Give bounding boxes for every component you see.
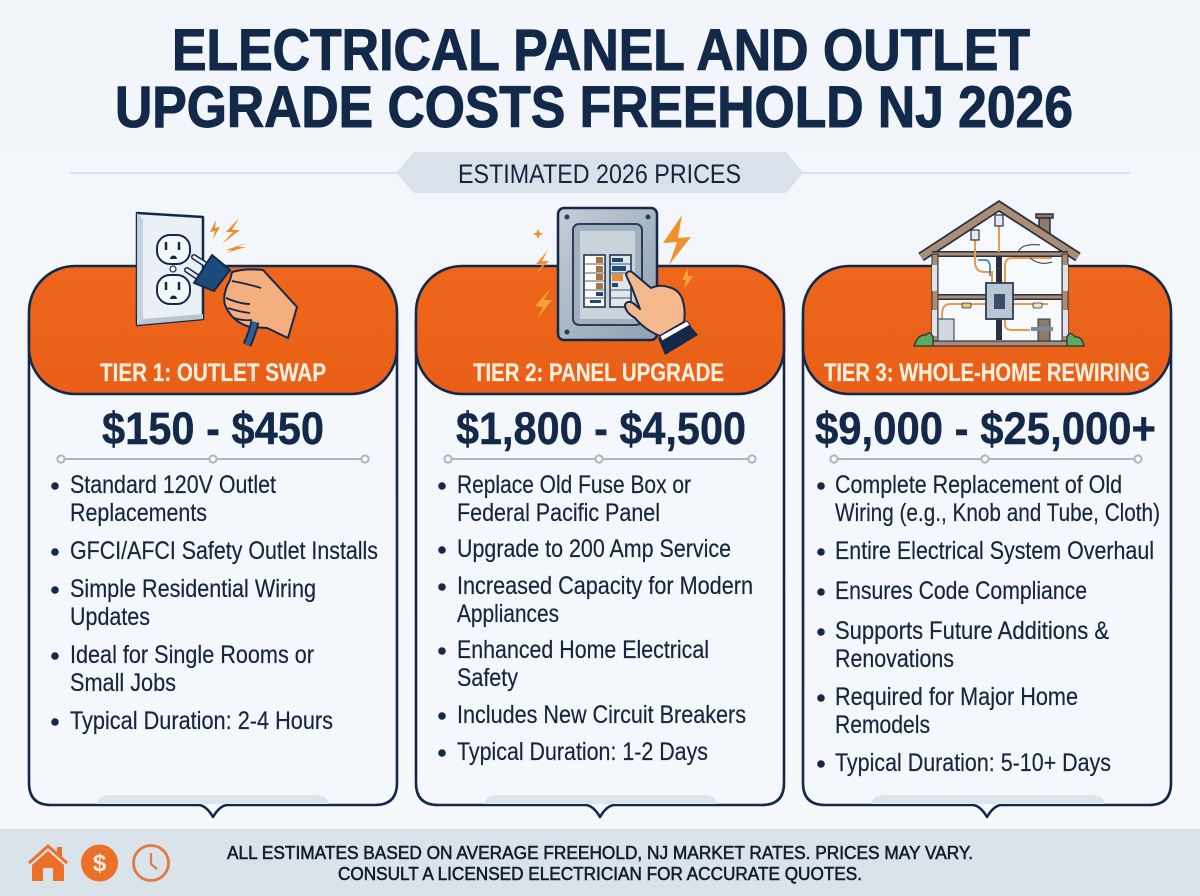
price range: $1,800 - $4,500: [456, 403, 746, 454]
bullet list: Increased Capacity for Modern: [457, 572, 753, 600]
panel: tier 1 outlet swap: [29, 213, 397, 817]
bullet list: Complete Replacement of Old: [835, 471, 1122, 499]
card header: [416, 266, 784, 394]
card body: [29, 320, 397, 817]
bullet list: Appliances: [457, 600, 559, 628]
tier heading: TIER 2: PANEL UPGRADE: [473, 359, 724, 387]
disclaimer text: [227, 843, 973, 884]
footer bar: [0, 829, 1200, 896]
bullet list: Ensures Code Compliance: [835, 577, 1087, 605]
bullet list: Simple Residential Wiring: [70, 575, 316, 603]
bullet list: GFCI/AFCI Safety Outlet Installs: [70, 537, 378, 565]
bullet list: Typical Duration: 5-10+ Days: [835, 749, 1111, 777]
bullet list: Typical Duration: 2-4 Hours: [70, 707, 333, 735]
bullet list: Supports Future Additions &: [835, 617, 1109, 645]
card body: [803, 320, 1171, 817]
bullet list: [817, 471, 1160, 777]
subtitle banner: [396, 152, 803, 193]
price range: $9,000 - $25,000+: [815, 403, 1156, 454]
bullet list: Ideal for Single Rooms or: [70, 641, 314, 669]
card body: [416, 320, 784, 817]
bullet list: Renovations: [835, 645, 954, 673]
bullet list: Typical Duration: 1-2 Days: [457, 738, 708, 766]
bullet list: [438, 471, 753, 766]
title: [115, 18, 1073, 140]
bullet list: Remodels: [835, 711, 930, 739]
bullet list: Replace Old Fuse Box or: [457, 471, 691, 499]
bullet list: Enhanced Home Electrical: [457, 636, 709, 664]
bullet list: [51, 471, 378, 735]
card header: [29, 266, 397, 394]
icon: house: [29, 846, 67, 881]
icon: clock: [134, 846, 168, 880]
price range: $150 - $450: [102, 403, 324, 454]
icon: dollar coin: $: [93, 850, 107, 877]
icon: house cutaway with wiring: [914, 206, 1084, 346]
bullet list: Small Jobs: [70, 669, 176, 697]
bullet list: Standard 120V Outlet: [70, 471, 276, 499]
icon: outlet and hand with plug: [137, 213, 297, 345]
bullet list: Includes New Circuit Breakers: [457, 701, 746, 729]
icon: breaker panel and pointing hand: [533, 208, 698, 355]
bullet list: Updates: [70, 603, 150, 631]
card header: [803, 266, 1171, 394]
bullet list: Upgrade to 200 Amp Service: [457, 535, 731, 563]
bullet list: Required for Major Home: [835, 683, 1078, 711]
panel: tier 2 panel upgrade: [416, 208, 784, 817]
subtitle banner: ESTIMATED 2026 PRICES: [458, 159, 741, 189]
bullet list: Federal Pacific Panel: [457, 499, 660, 527]
title: UPGRADE COSTS FREEHOLD NJ 2026: [115, 75, 1073, 140]
bullet list: Replacements: [70, 499, 207, 527]
icon: dollar coin: [81, 844, 118, 882]
disclaimer text: CONSULT A LICENSED ELECTRICIAN FOR ACCURATE QUOTES.: [338, 864, 862, 884]
tier heading: TIER 1: OUTLET SWAP: [100, 359, 326, 387]
title: ELECTRICAL PANEL AND OUTLET: [172, 18, 1030, 83]
bullet list: Entire Electrical System Overhaul: [835, 537, 1154, 565]
panel: tier 3 whole-home rewiring: [803, 206, 1171, 817]
disclaimer text: ALL ESTIMATES BASED ON AVERAGE FREEHOLD, NJ MARKET RATES. PRICES MAY VARY.: [227, 843, 973, 863]
bullet list: Safety: [457, 664, 518, 692]
